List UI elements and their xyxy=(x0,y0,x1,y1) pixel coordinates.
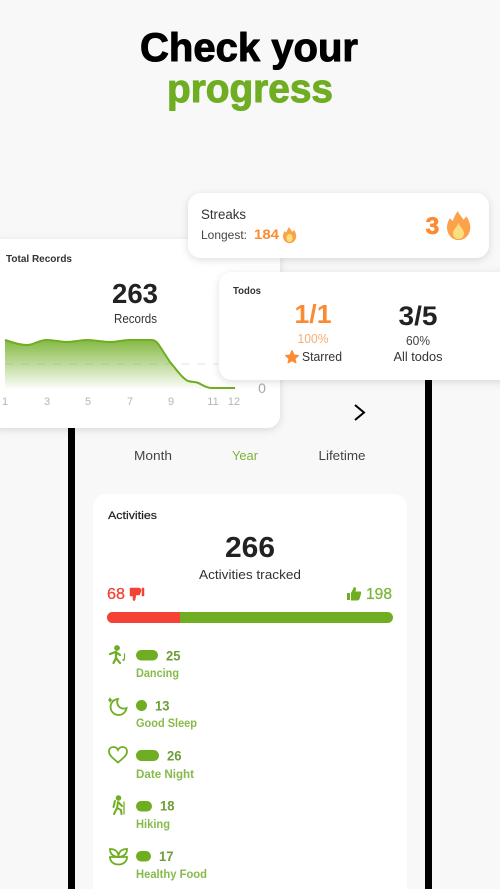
activities label: Activities tracked xyxy=(199,567,301,582)
starred todos: 100% xyxy=(298,332,328,346)
title: progress xyxy=(167,67,333,111)
title xyxy=(140,26,358,111)
longest streak: Longest: xyxy=(201,228,247,242)
panel: total records xyxy=(0,239,280,428)
activities heading: Activities xyxy=(108,510,158,522)
positive count xyxy=(347,586,392,603)
progress bar xyxy=(107,612,393,623)
row: date night: 26 xyxy=(167,748,182,764)
phone frame left edge xyxy=(68,420,75,889)
activities value: 266 xyxy=(225,532,275,564)
row: hiking: Hiking xyxy=(136,819,170,831)
current streak xyxy=(426,211,470,240)
area chart: 7 xyxy=(127,396,133,408)
area chart: 1 xyxy=(2,396,8,408)
all todos: All todos xyxy=(394,350,442,364)
area chart: 5 xyxy=(85,396,91,408)
area chart xyxy=(2,340,266,408)
longest streak xyxy=(201,226,296,243)
title: Check your xyxy=(140,26,358,70)
panel: activities xyxy=(93,494,407,889)
row: healthy food: Healthy Food xyxy=(136,869,207,881)
total records value: 263 xyxy=(112,278,158,309)
records label: Records xyxy=(114,312,157,326)
total records heading: Total Records xyxy=(6,253,72,265)
row: good sleep xyxy=(108,697,197,730)
area chart: 3 xyxy=(44,396,50,408)
positive count: 198 xyxy=(366,586,392,603)
starred todos: 1/1 xyxy=(294,299,332,329)
panel: todos xyxy=(219,272,500,380)
starred todos xyxy=(286,299,342,364)
all todos xyxy=(394,301,442,364)
area chart: 11 xyxy=(207,396,219,408)
row: healthy food: 17 xyxy=(159,848,174,864)
starred todos: Starred xyxy=(302,350,342,364)
icon: heart xyxy=(109,747,127,762)
icon: hiker xyxy=(114,796,124,814)
negative count xyxy=(107,586,144,603)
period tabs: Year xyxy=(232,448,259,463)
area chart: 9 xyxy=(168,396,174,408)
icon: plant bowl xyxy=(110,849,127,864)
current streak: 3 xyxy=(426,213,439,240)
longest streak: 184 xyxy=(254,226,279,242)
icon: dancer xyxy=(110,646,125,663)
period tabs: Lifetime xyxy=(318,448,366,463)
row: hiking: 18 xyxy=(160,798,175,814)
row: good sleep: Good Sleep xyxy=(136,718,197,730)
row: hiking xyxy=(114,796,175,831)
area chart: 0 xyxy=(258,380,266,396)
phone frame right edge xyxy=(425,375,432,889)
area chart: 12 xyxy=(228,396,240,408)
row: date night: Date Night xyxy=(136,769,194,781)
row: dancing xyxy=(110,646,181,680)
streaks heading: Streaks xyxy=(201,207,246,222)
row: dancing: Dancing xyxy=(136,668,179,680)
row: healthy food xyxy=(110,848,207,881)
panel: streaks xyxy=(188,193,489,258)
row: dancing: 25 xyxy=(166,648,181,664)
period tabs xyxy=(134,448,366,463)
todos heading: Todos xyxy=(233,285,261,297)
icon: moon xyxy=(108,697,126,715)
all todos: 3/5 xyxy=(398,301,438,331)
negative count: 68 xyxy=(107,586,125,603)
row: date night xyxy=(109,747,194,781)
period tabs: Month xyxy=(134,448,172,463)
chevron arrow xyxy=(355,405,364,420)
all todos: 60% xyxy=(406,334,430,348)
row: good sleep: 13 xyxy=(155,698,170,714)
